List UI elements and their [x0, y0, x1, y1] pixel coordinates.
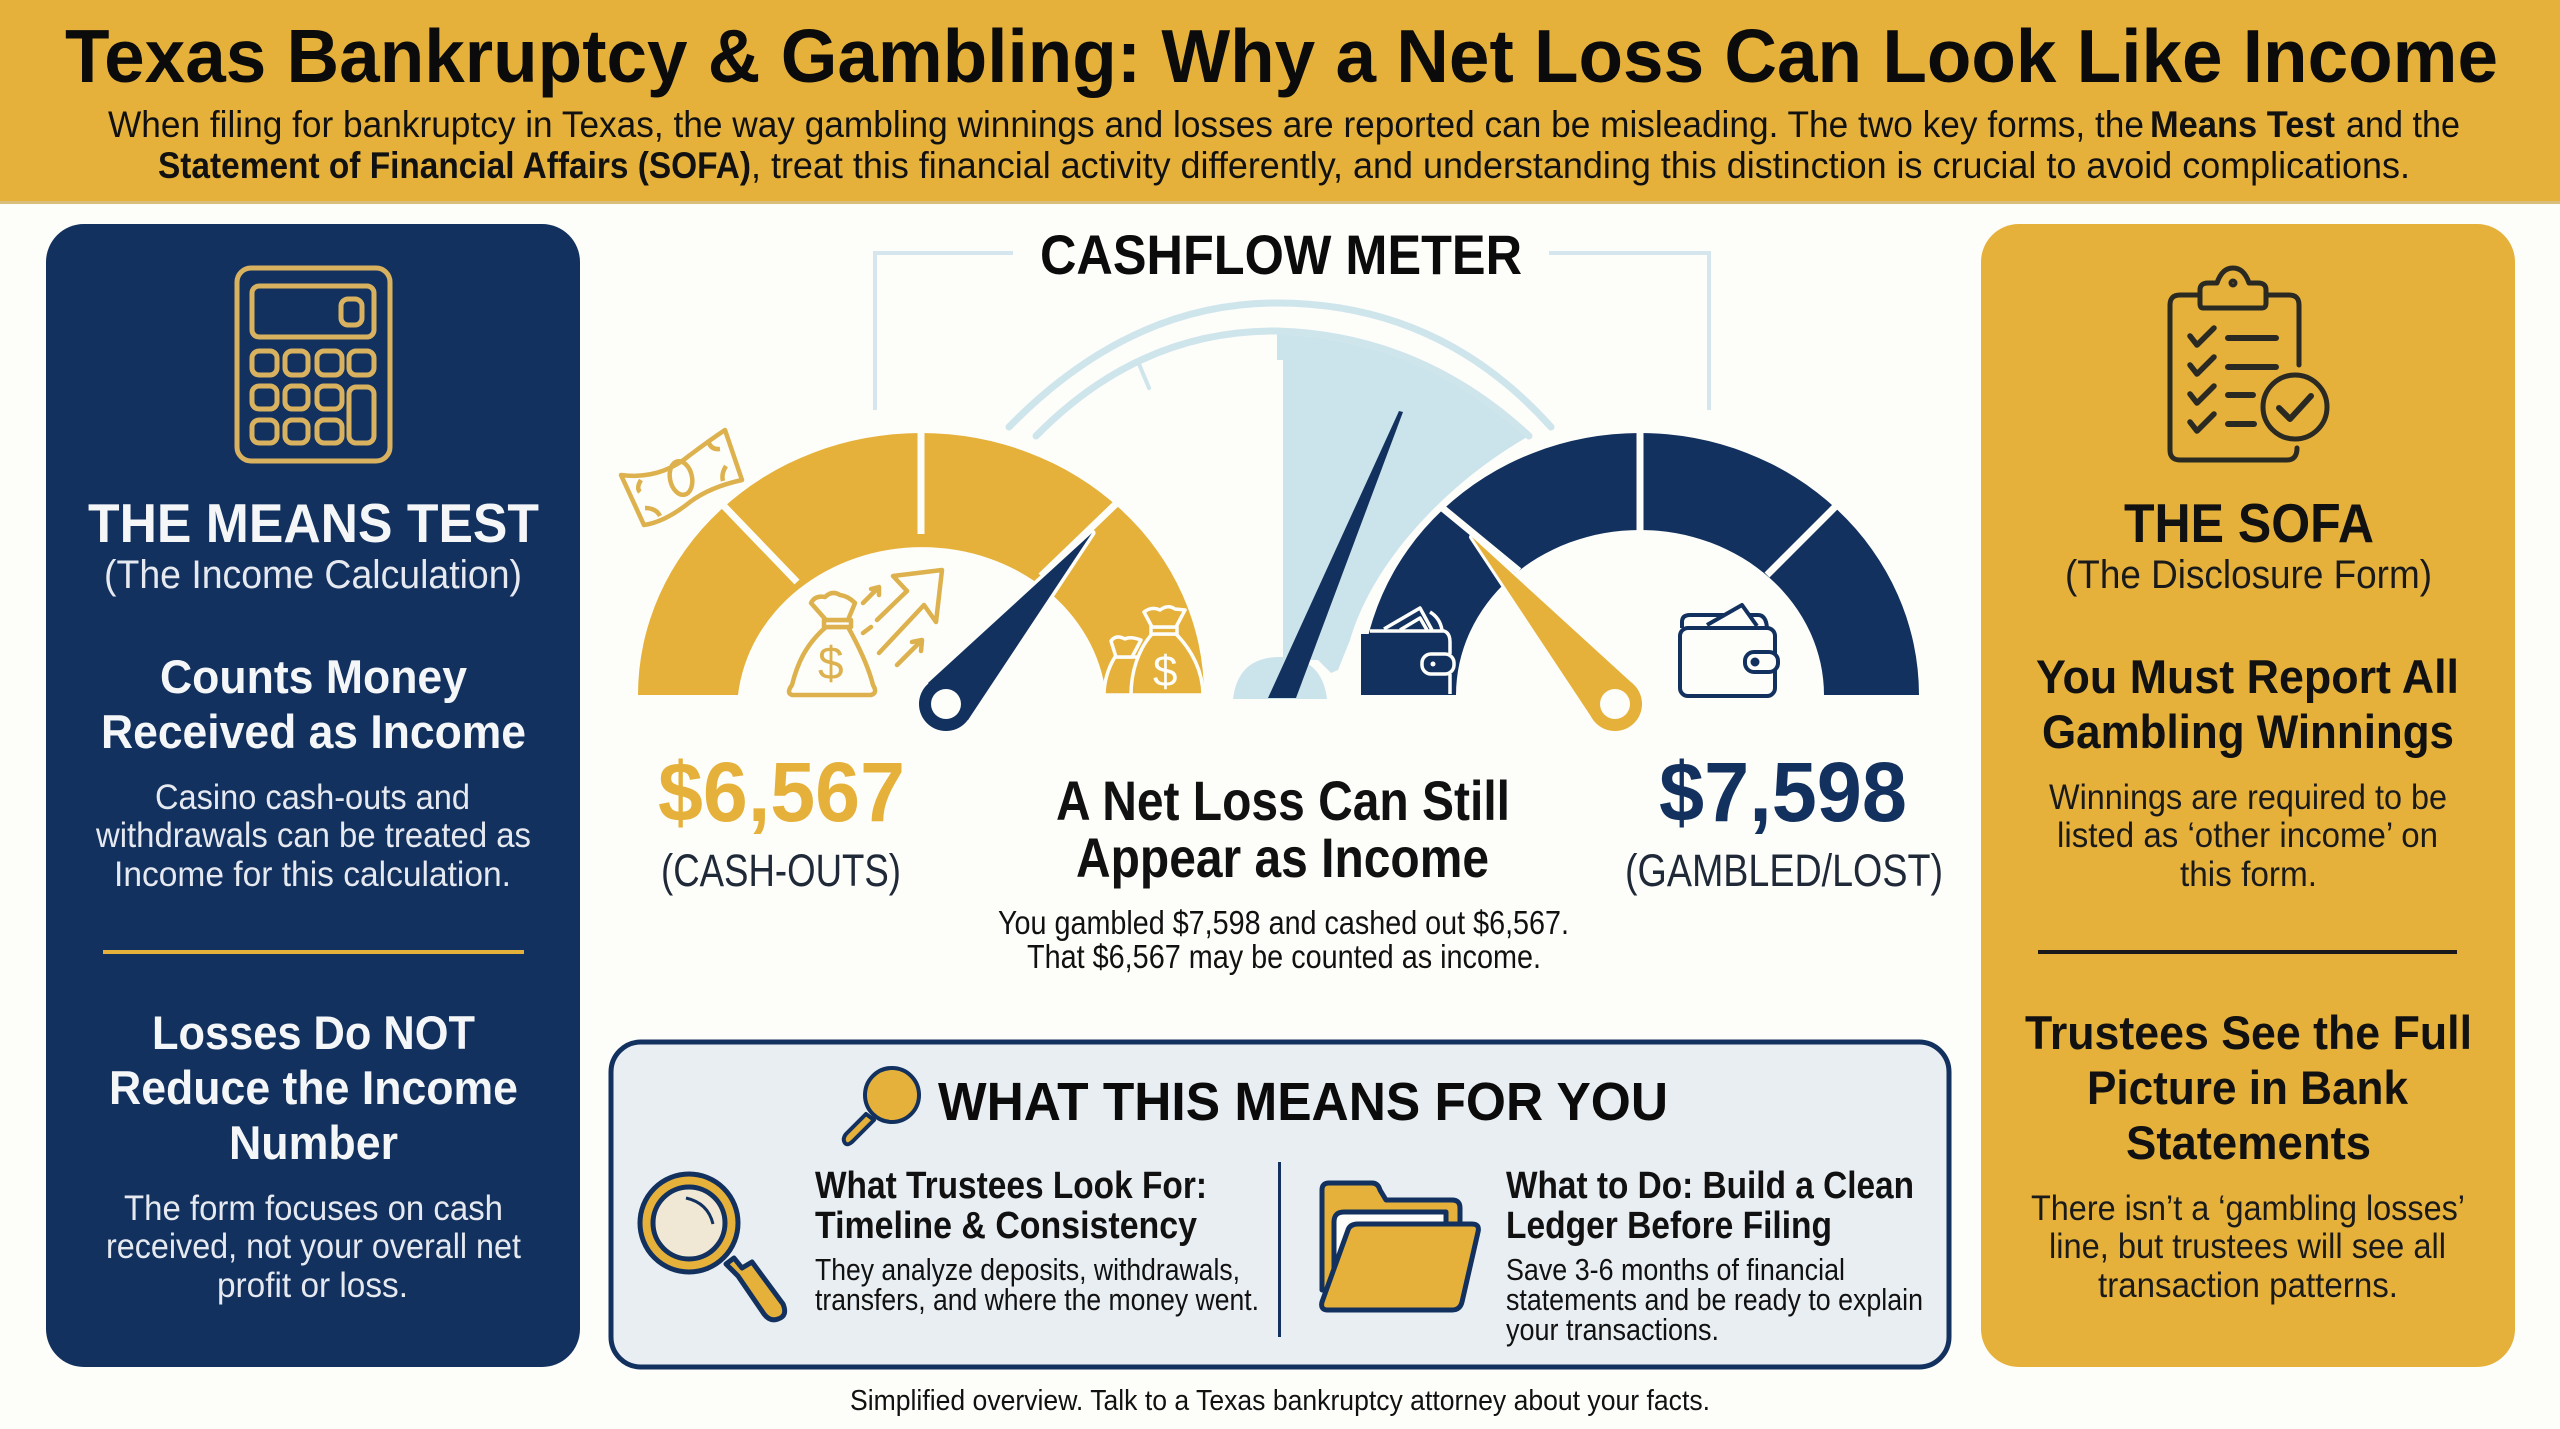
stat: gambled: $7,598 [1659, 745, 1907, 839]
icon: clipboard checklist [2170, 268, 2327, 460]
header band [0, 0, 2560, 204]
point: counts money: withdrawals can be treated as [95, 816, 531, 855]
title: Texas Bankruptcy & Gambling: Why a Net Loss Can Look Like Income [65, 14, 2498, 98]
block: what to do: your transactions. [1506, 1312, 1719, 1347]
footer note: Simplified overview. Talk to a Texas bankruptcy attorney about your facts. [850, 1385, 1710, 1417]
panel: what this means for you [611, 1042, 1949, 1367]
intro text: When filing for bankruptcy in Texas, the way gambling winnings and losses are reported can be misleading. The two key forms, the [108, 104, 2144, 145]
panel heading: THE MEANS TEST [88, 492, 539, 554]
point: report winnings: listed as ‘other income’ on [2057, 816, 2438, 855]
cashflow meter [621, 223, 1943, 975]
block: what to do: What to Do: Build a Clean [1506, 1165, 1914, 1207]
intro text: Statement of Financial Affairs (SOFA) [158, 145, 751, 186]
block: what to do: Save 3-6 months of financial [1506, 1252, 1845, 1287]
needle: cash-outs [914, 533, 1092, 736]
key message: You gambled $7,598 and cashed out $6,567. [998, 904, 1569, 941]
stat: gambled [1625, 745, 1943, 896]
point: trustees: line, but trustees will see all [2049, 1227, 2446, 1266]
block: what trustees look for [815, 1165, 1259, 1317]
point: losses: Reduce the Income [109, 1061, 518, 1114]
icon: banknote [621, 430, 742, 525]
block: what trustees look for: They analyze deposits, withdrawals, [815, 1252, 1240, 1287]
stat: cash-outs: (CASH-OUTS) [661, 845, 901, 896]
point: report winnings: Winnings are required to be [2049, 778, 2447, 817]
point: losses: The form focuses on cash [124, 1189, 503, 1228]
icon: wallet on gauge [1361, 608, 1454, 694]
point: trustees: There isn’t a ‘gambling losses’ [2031, 1189, 2465, 1228]
intro text: and the [2346, 104, 2460, 145]
panel subheading: (The Income Calculation) [104, 553, 522, 597]
block: what to do [1506, 1165, 1923, 1347]
point: losses: Losses Do NOT [152, 1006, 475, 1059]
stat: gambled: (GAMBLED/LOST) [1625, 845, 1943, 896]
point: trustees: Statements [2126, 1116, 2371, 1169]
panel: the means test [46, 224, 580, 1367]
block: what trustees look for: What Trustees Look For: [815, 1165, 1207, 1207]
point: report winnings: this form. [2180, 855, 2317, 894]
point: losses: Number [229, 1116, 398, 1169]
point: losses [106, 1006, 521, 1305]
point: report winnings [2036, 650, 2459, 894]
point: report winnings: You Must Report All [2036, 650, 2459, 703]
block: what trustees look for: transfers, and where the money went. [815, 1282, 1259, 1317]
point: counts money: Received as Income [101, 705, 526, 758]
meter heading: CASHFLOW METER [1040, 223, 1522, 286]
panel: the sofa [1981, 224, 2515, 1367]
central dial [1009, 303, 1551, 699]
gauge: cash-outs [621, 428, 1204, 736]
panel subheading: (The Disclosure Form) [2065, 553, 2432, 597]
block: what trustees look for: Timeline & Consistency [815, 1205, 1197, 1247]
icon: small magnifier [844, 1068, 919, 1144]
point: counts money: Counts Money [160, 650, 467, 703]
point: trustees: transaction patterns. [2098, 1266, 2398, 1305]
icon: folder [1322, 1183, 1478, 1310]
intro text: Means Test [2150, 104, 2335, 145]
block: what to do: Ledger Before Filing [1506, 1205, 1832, 1247]
needle: gambled [1472, 537, 1647, 736]
point: trustees: Picture in Bank [2087, 1061, 2409, 1114]
point: counts money: Casino cash-outs and [155, 778, 470, 817]
icon: money bag with arrows [789, 570, 942, 695]
icon: money bag with arrows: $ [818, 637, 844, 689]
section heading: WHAT THIS MEANS FOR YOU [938, 1072, 1668, 1132]
icon: money bags on gauge: $ [1153, 647, 1177, 696]
point: losses: profit or loss. [217, 1266, 408, 1305]
key message: Appear as Income [1076, 826, 1489, 889]
needle: central [1268, 411, 1403, 698]
point: losses: received, not your overall net [106, 1227, 521, 1266]
icon: wallet outline [1680, 605, 1778, 696]
icon: magnifier [640, 1174, 785, 1320]
stat: cash-outs [658, 745, 905, 896]
block: what to do: statements and be ready to explain [1506, 1282, 1923, 1317]
icon: calculator [237, 268, 390, 461]
point: report winnings: Gambling Winnings [2042, 705, 2454, 758]
stat: cash-outs: $6,567 [658, 745, 905, 839]
key message: That $6,567 may be counted as income. [1027, 938, 1541, 975]
intro text [108, 104, 2460, 186]
point: trustees [2025, 1006, 2472, 1305]
point: trustees: Trustees See the Full [2025, 1006, 2472, 1059]
point: counts money [95, 650, 531, 894]
intro text: , treat this financial activity differently, and understanding this distinction is crucial to avoid complications. [751, 145, 2410, 186]
key message: A Net Loss Can Still [1056, 769, 1510, 832]
icon: money bags on gauge [1104, 607, 1203, 696]
gauge: gambled [1361, 428, 1919, 736]
key message [998, 769, 1569, 975]
point: counts money: Income for this calculation. [114, 855, 511, 894]
panel heading: THE SOFA [2124, 492, 2374, 554]
